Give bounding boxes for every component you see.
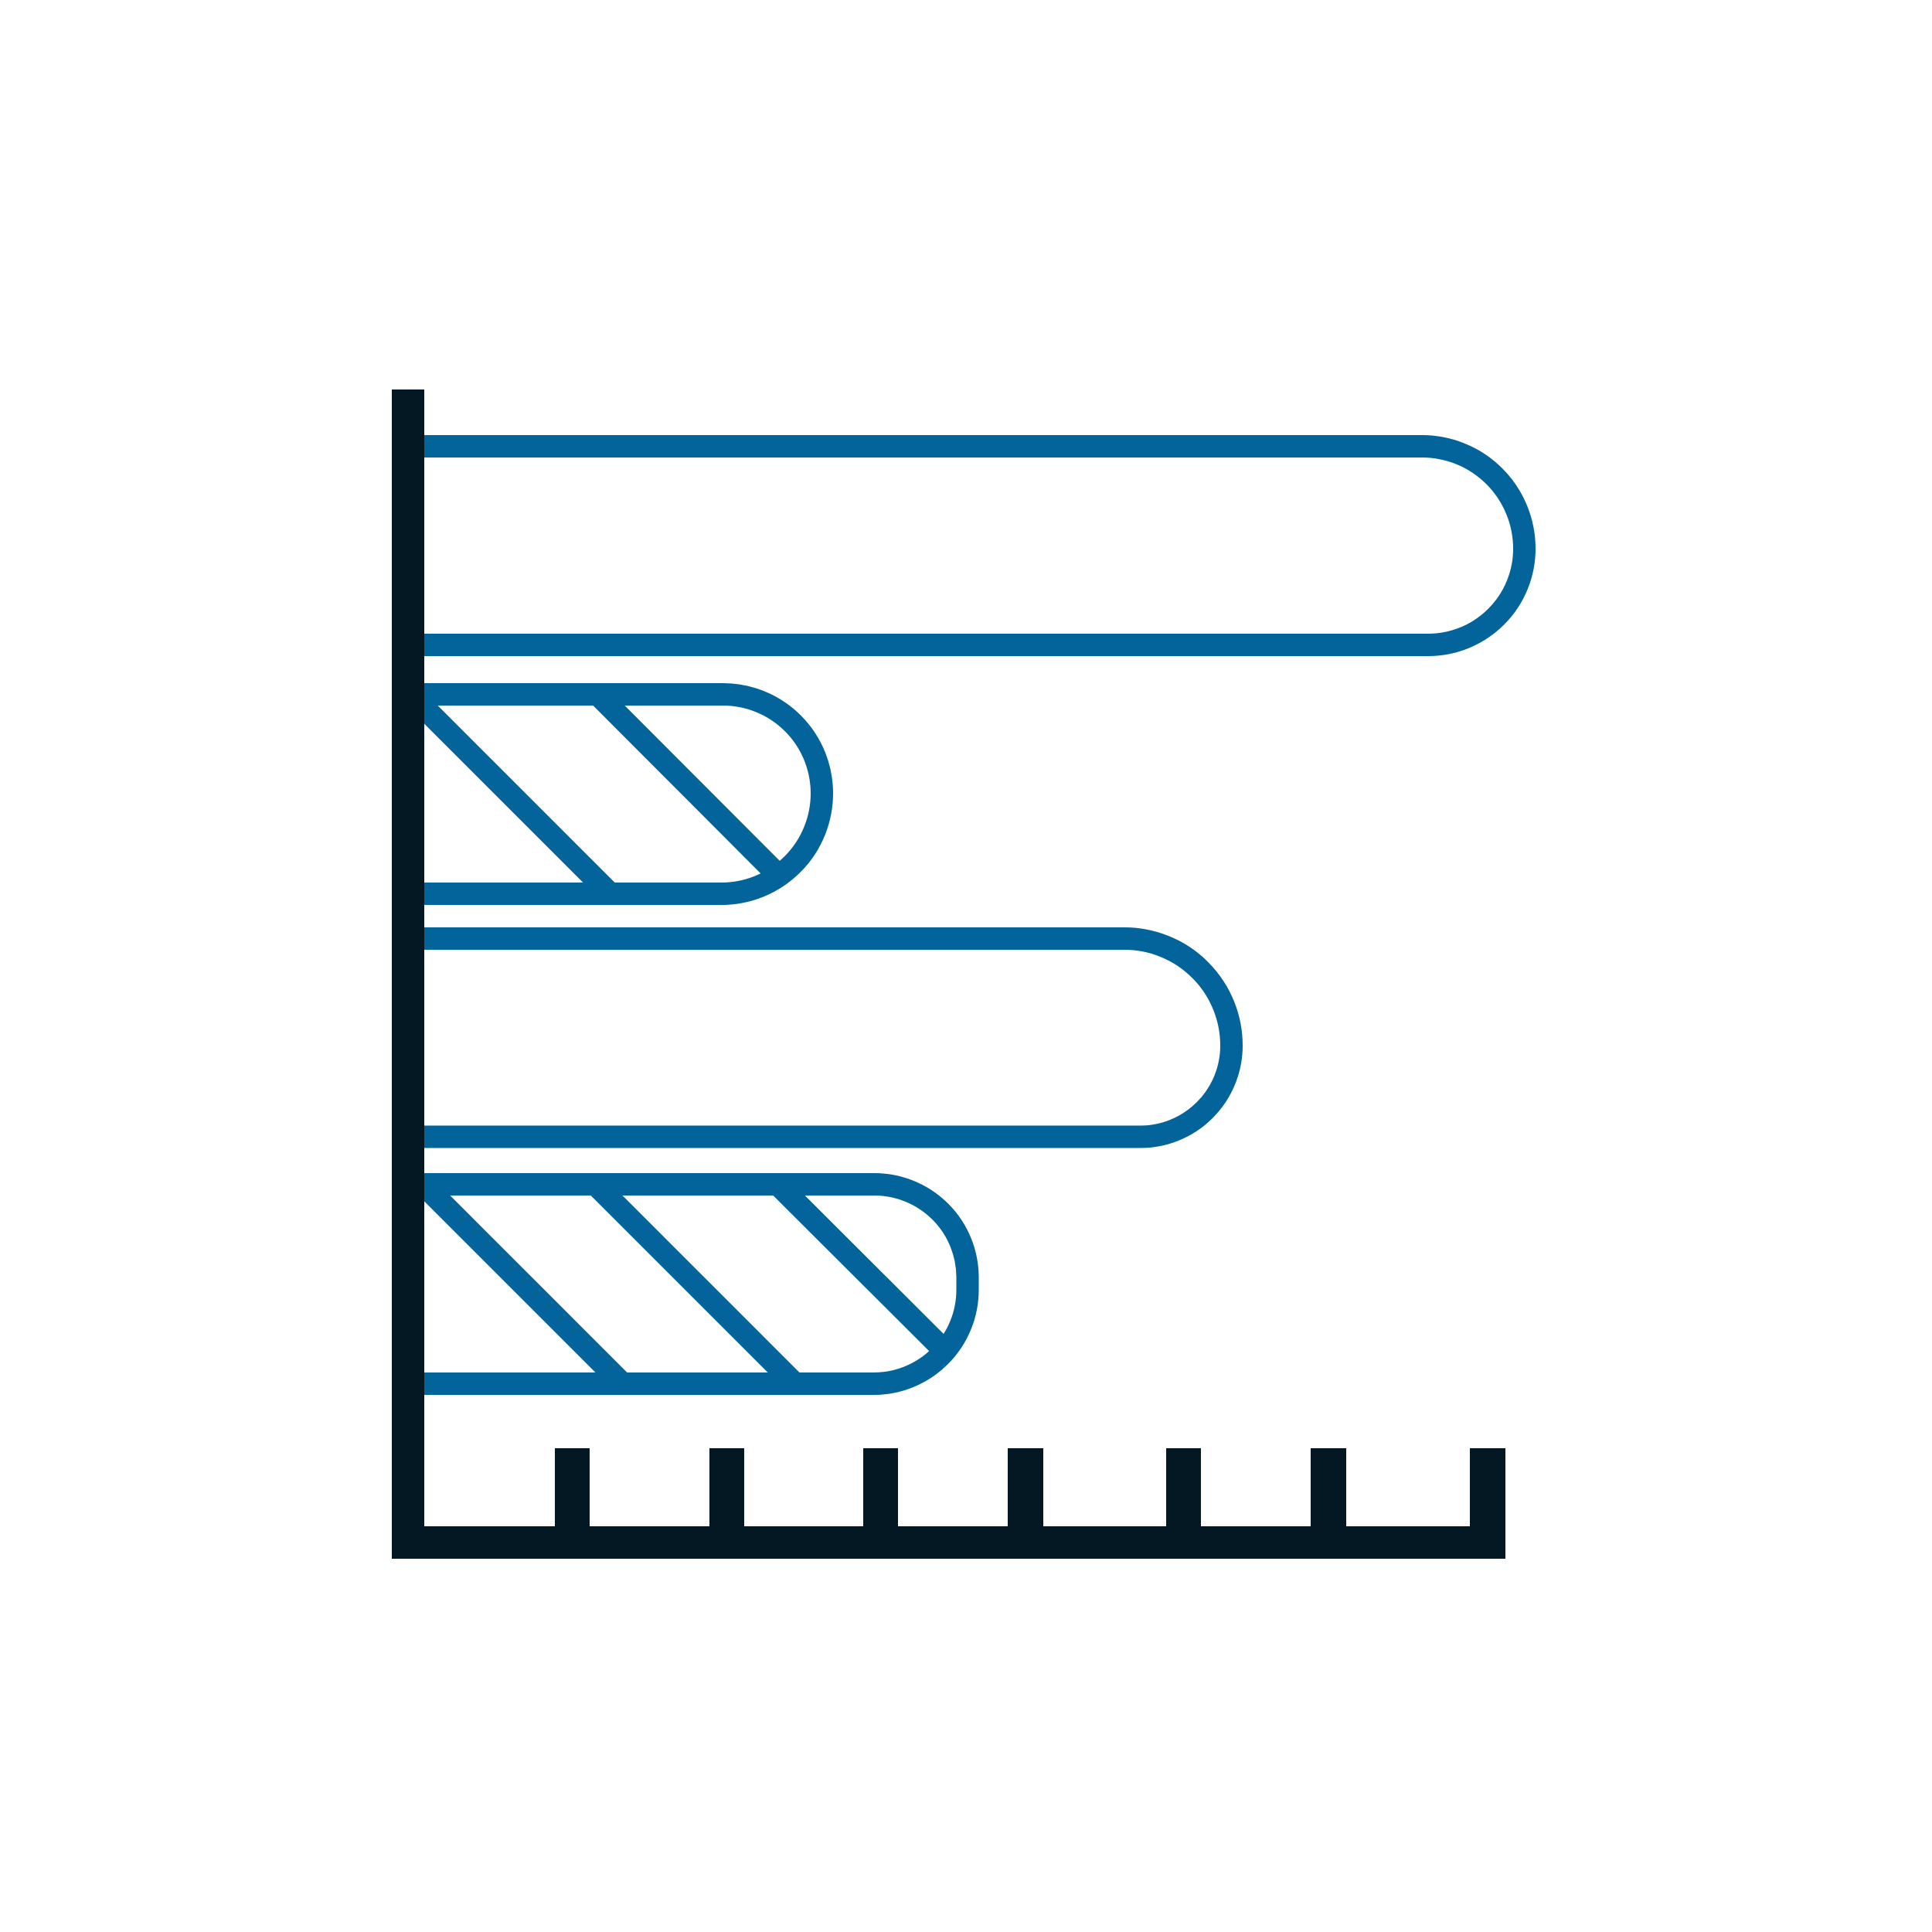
horizontal axis — [392, 1526, 1505, 1559]
bar 4: medium hatched bar — [417, 1184, 968, 1383]
bar 4 hatch stripes — [423, 1184, 944, 1383]
bar 2 hatch stripes — [411, 694, 779, 893]
bars group — [411, 447, 1524, 1383]
bar 3: medium plain bar — [417, 938, 1232, 1137]
chart axes — [392, 389, 1505, 1559]
bar 4 outline — [417, 1184, 968, 1383]
axis tick marks — [555, 1448, 1505, 1533]
bar 2 outline — [417, 694, 822, 893]
vertical axis — [392, 389, 424, 1559]
bar 1: longest plain bar — [417, 447, 1524, 645]
bar 2: short hatched bar — [411, 694, 822, 893]
